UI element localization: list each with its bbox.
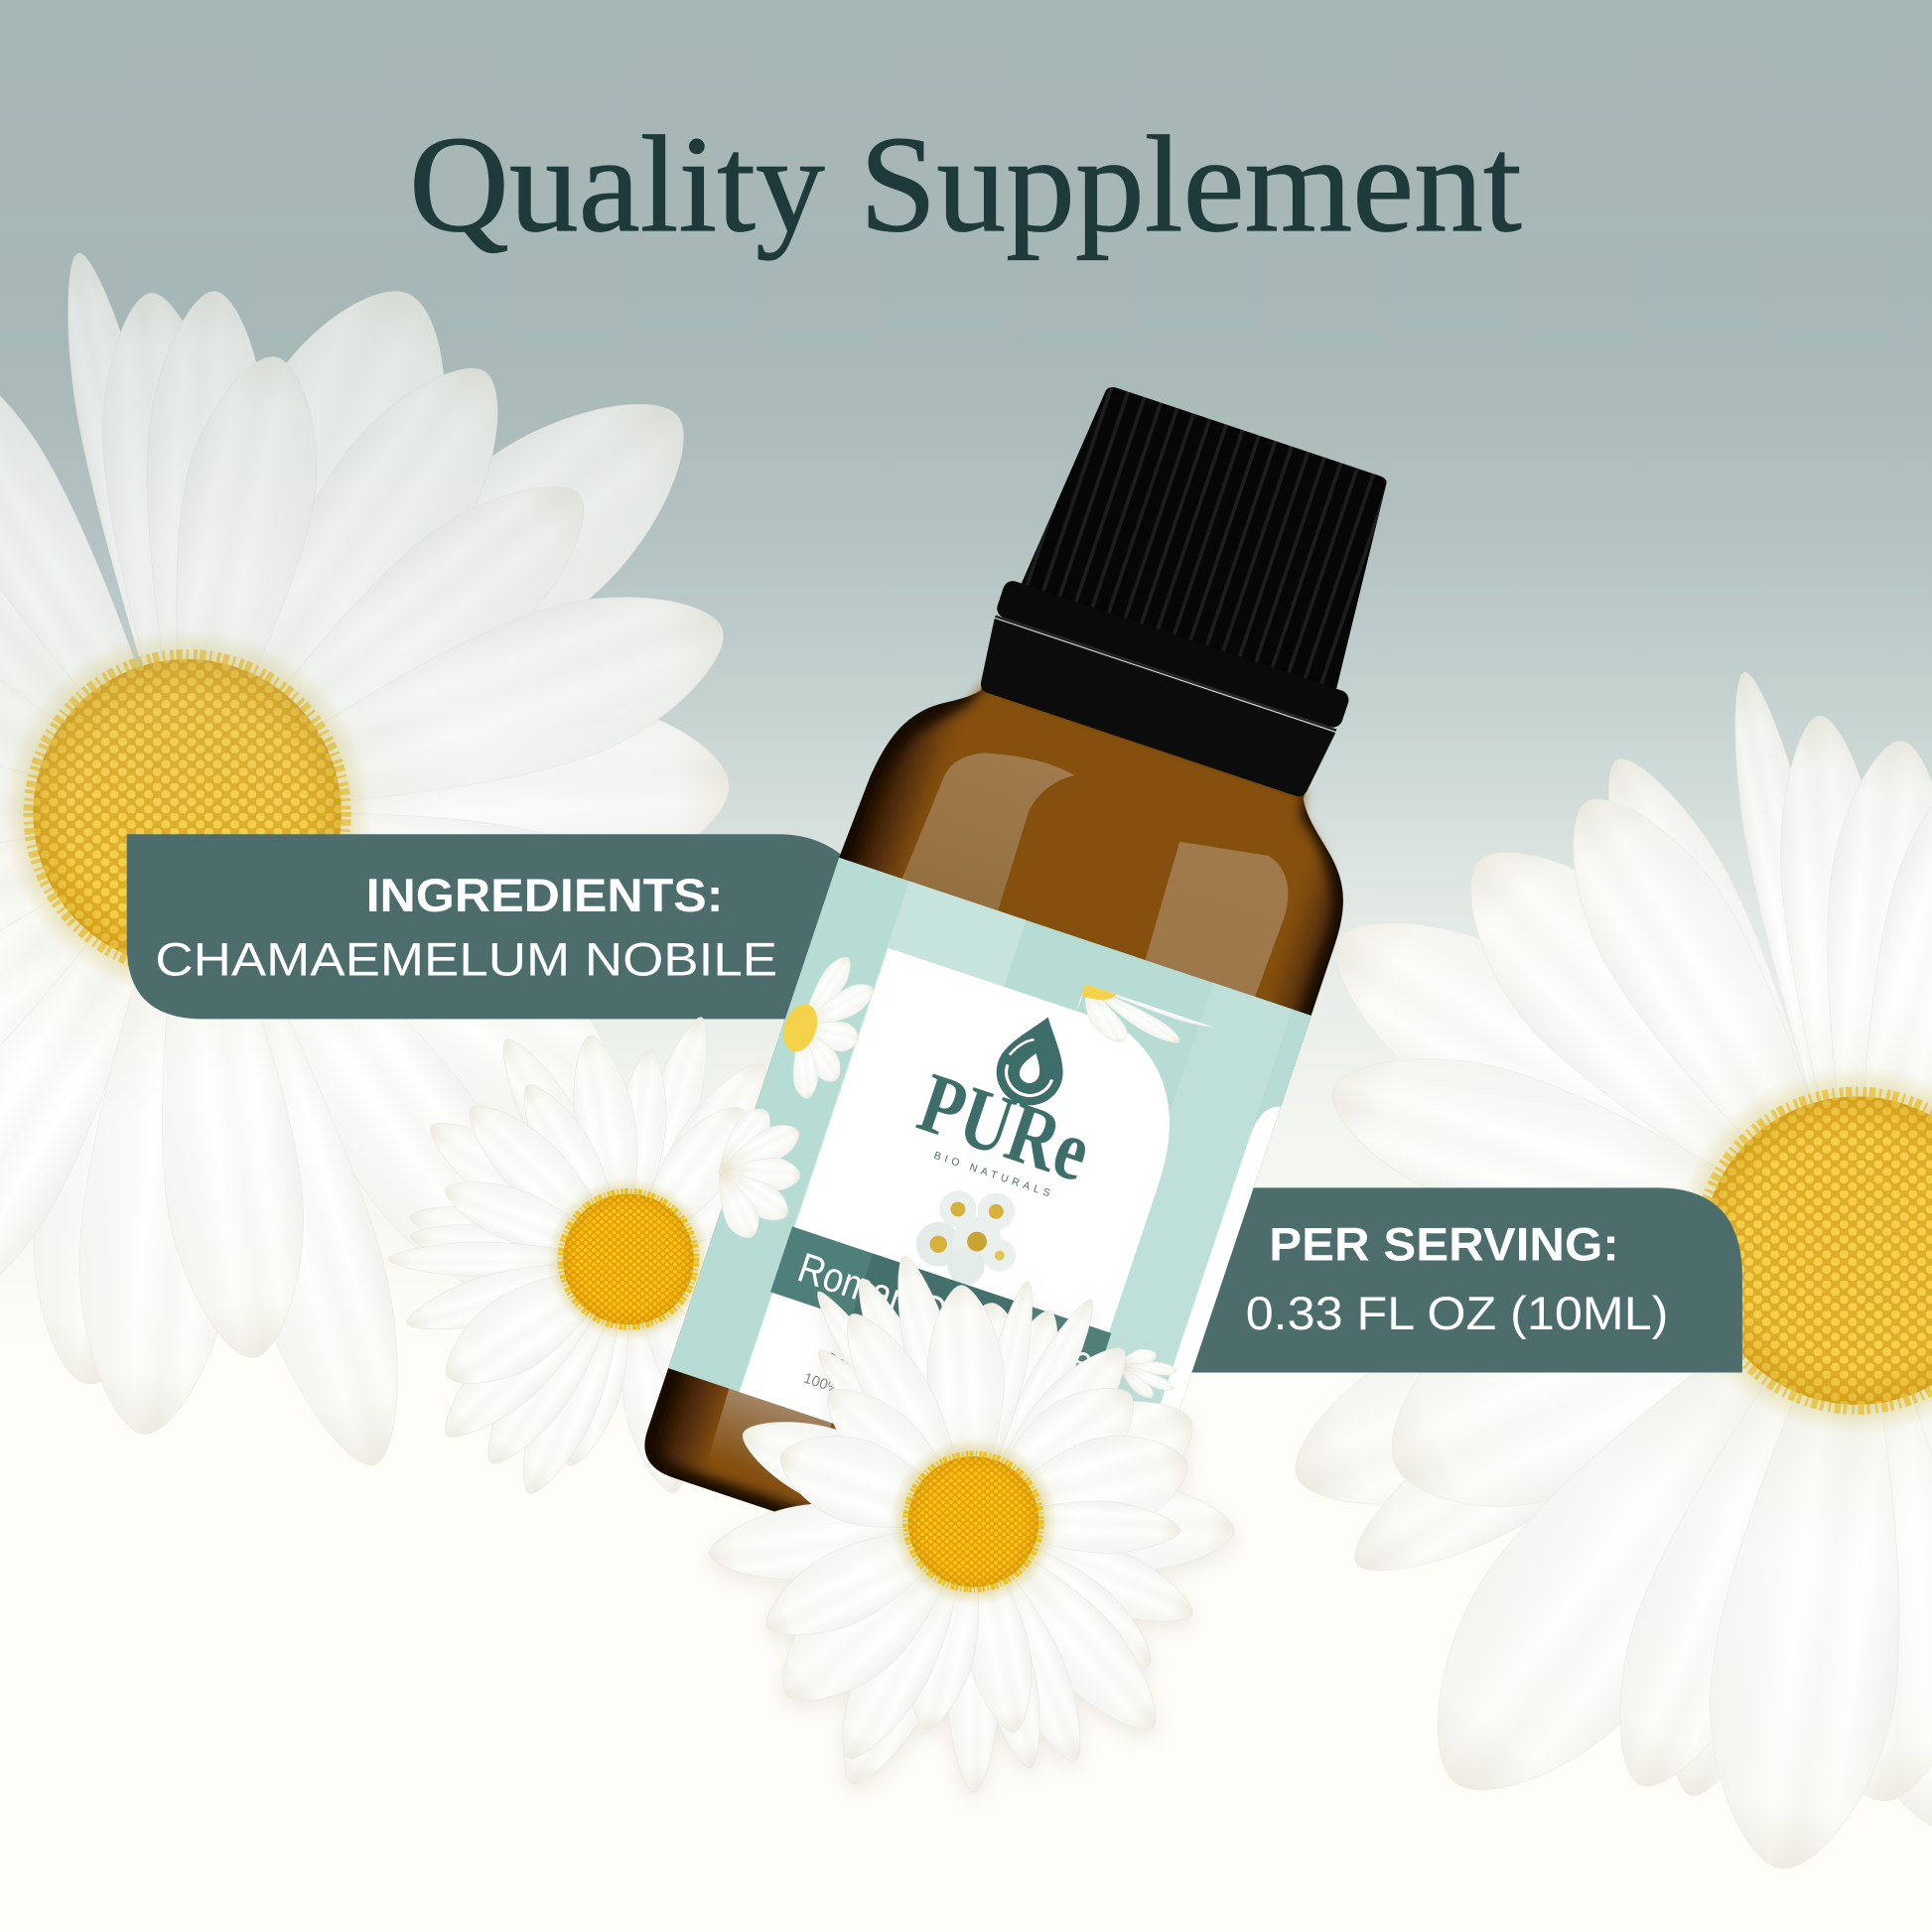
brand logo: BIO NATURALS: [932, 1150, 1055, 1201]
product name band: Roman Chamomile: [792, 1244, 1099, 1386]
printed daisy, left: [762, 941, 889, 1116]
small label text: 100% Pure Essential Oil: [801, 1371, 957, 1437]
banner: per serving: [1146, 1187, 1742, 1373]
glass highlight lower: [706, 1389, 832, 1491]
haze tint over upper petals: [0, 234, 1932, 899]
brand logo: PURe: [908, 1054, 1102, 1199]
banner: ingredients: INGREDIENTS:: [366, 869, 724, 921]
printed daisy, top: [1076, 984, 1215, 1043]
small label text: [801, 1343, 967, 1437]
banner: per serving: PER SERVING:: [1269, 1218, 1619, 1271]
amber bottle with label: [644, 387, 1387, 1511]
large daisy, right: [1267, 666, 1932, 1879]
black cap: [970, 374, 1420, 802]
title: Quality Supplement: [409, 108, 1522, 261]
banner: per serving: 0.33 FL OZ (10ML): [1246, 1287, 1668, 1339]
white side strip: [1122, 1100, 1281, 1526]
small label text: Cold Pressed Oil: [821, 1347, 950, 1408]
glass highlight left: [902, 732, 1075, 920]
medium daisy, left of bottle: [388, 1011, 825, 1504]
glass highlight right: [945, 828, 1302, 1582]
small daisy, front of bottle: [705, 1250, 1236, 1799]
printed petals over label edge: [684, 1093, 822, 1257]
bouquet illustration: [907, 1173, 1034, 1298]
printed daisy, lower right: [1102, 1336, 1185, 1409]
brand logo: [905, 988, 1124, 1206]
glass body: [635, 656, 1378, 1623]
banner: ingredients: [127, 834, 853, 1019]
banner: ingredients: CHAMAEMELUM NOBILE: [155, 932, 777, 985]
white label panel: [740, 948, 1170, 1424]
large daisy, left: [0, 247, 748, 1482]
label: [668, 858, 1311, 1424]
